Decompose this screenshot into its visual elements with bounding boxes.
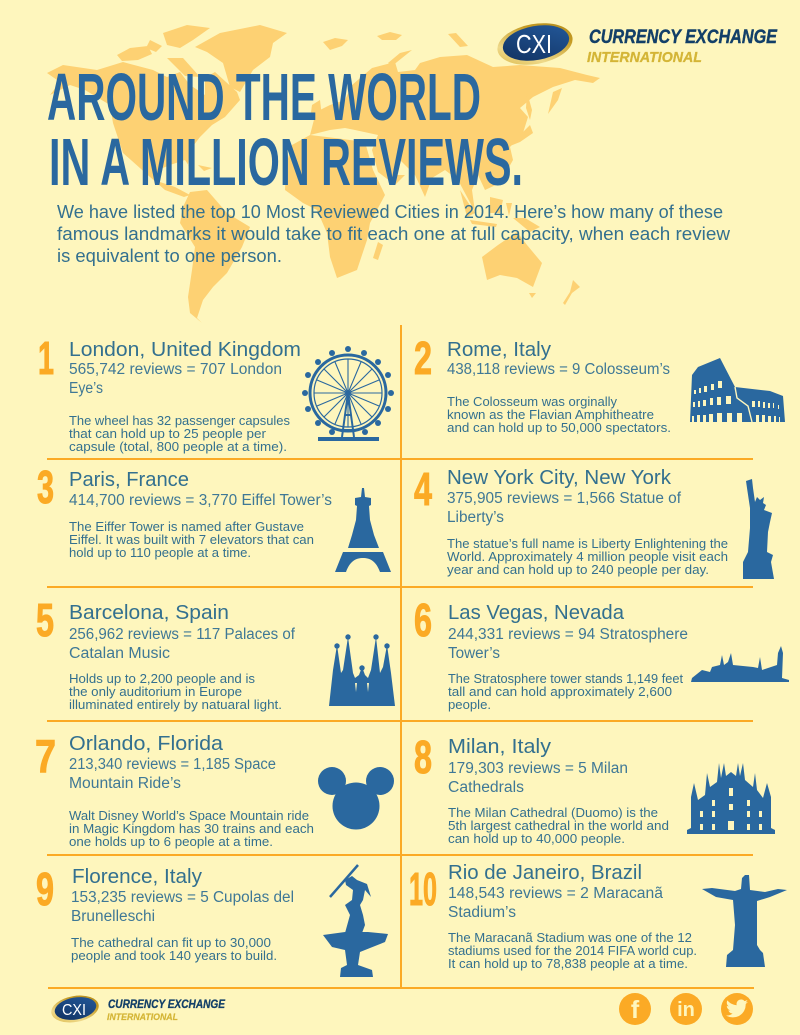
panel: Rome: and can hold up to 50,000 spectators. bbox=[447, 421, 671, 435]
panel: Rome: known as the Flavian Amphitheatre bbox=[447, 408, 654, 422]
panel: Milan: 5th largest cathedral in the world and bbox=[448, 819, 669, 833]
intro text: famous landmarks it would take to fit each one at full capacity, when each review bbox=[57, 224, 731, 244]
panel: London: Eye’s bbox=[69, 380, 103, 397]
panel: Orlando bbox=[35, 730, 394, 849]
panel: Florence: 153,235 reviews = 5 Cupolas del bbox=[71, 889, 294, 906]
icon: Sagrada Familia bbox=[329, 634, 395, 706]
panel: Rio de Janeiro: It can hold up to 78,838 people at a time. bbox=[448, 957, 688, 971]
social icons bbox=[619, 993, 753, 1025]
panel: Florence bbox=[36, 863, 388, 977]
panel: Milan: Cathedrals bbox=[448, 779, 524, 796]
panel: Las Vegas: Tower’s bbox=[448, 645, 500, 662]
icon: Eiffel Tower bbox=[335, 488, 391, 572]
icon: Christ the Redeemer bbox=[702, 875, 787, 967]
panel: New York: 375,905 reviews = 1,566 Statue of bbox=[447, 490, 682, 507]
panel: Milan: can hold up to 40,000 people. bbox=[448, 832, 625, 846]
panel: Rio de Janeiro: stadiums used for the 2014 FIFA world cup. bbox=[448, 944, 697, 958]
world map background bbox=[47, 25, 600, 323]
panel: Paris: 414,700 reviews = 3,770 Eiffel Tower’s bbox=[69, 492, 332, 509]
panel: Florence: Brunelleschi bbox=[71, 908, 155, 925]
icon: London Eye bbox=[302, 346, 394, 441]
panel: Las Vegas: Las Vegas, Nevada bbox=[448, 601, 625, 624]
panel: Milan: Milan, Italy bbox=[448, 735, 552, 758]
panel: New York: The statue’s full name is Liberty Enlightening the bbox=[447, 537, 728, 551]
panel: Florence: people and took 140 years to build. bbox=[71, 949, 277, 963]
icon: fountain statue bbox=[323, 865, 388, 977]
icon: Statue of Liberty bbox=[743, 479, 774, 579]
panel: Orlando: one holds up to 6 people at a time. bbox=[69, 835, 273, 849]
panel: London: that can hold up to 25 people per bbox=[69, 427, 266, 441]
panel: Las Vegas: tall and can hold approximately 2,600 bbox=[448, 685, 672, 699]
panel: Milan: 179,303 reviews = 5 Milan bbox=[448, 760, 628, 777]
panel: Paris: hold up to 110 people at a time. bbox=[69, 546, 251, 560]
icon: Mickey Mouse ears bbox=[318, 767, 394, 830]
panel: Milan bbox=[414, 731, 775, 846]
icon: Milan Cathedral bbox=[687, 763, 775, 834]
panel: Las Vegas: 244,331 reviews = 94 Stratosphere bbox=[448, 626, 688, 643]
panel: Barcelona: 256,962 reviews = 117 Palaces of bbox=[69, 626, 296, 643]
footer logo bbox=[49, 992, 226, 1026]
intro text: is equivalent to one person. bbox=[57, 246, 282, 266]
panel: Barcelona: the only auditorium in Europe bbox=[69, 685, 242, 699]
header logo: INTERNATIONAL bbox=[587, 49, 702, 66]
panel: London bbox=[38, 332, 394, 454]
title: AROUND THE WORLD bbox=[47, 60, 481, 135]
panel: Las Vegas bbox=[414, 594, 789, 712]
panel: Rio de Janeiro: 10 bbox=[409, 863, 437, 915]
panel: Orlando: Walt Disney World’s Space Mountain ride bbox=[69, 809, 309, 823]
panel: New York: year and can hold up to 240 people per day. bbox=[447, 563, 709, 577]
grid lines bbox=[47, 325, 754, 989]
panel: Orlando: in Magic Kingdom has 30 trains and each bbox=[69, 822, 314, 836]
panel: Barcelona: illuminated entirely by natuaral light. bbox=[69, 698, 282, 712]
panel: Barcelona: Barcelona, Spain bbox=[69, 601, 229, 624]
icon: Facebook: f bbox=[631, 996, 640, 1024]
panel: London: 1 bbox=[38, 332, 54, 384]
panel: London: London, United Kingdom bbox=[69, 338, 301, 361]
title bbox=[47, 60, 523, 200]
panel: Orlando: 7 bbox=[35, 730, 56, 782]
panel: Rio de Janeiro: Stadium’s bbox=[448, 904, 516, 921]
header logo: CXI bbox=[516, 29, 552, 59]
panel: Las Vegas: The Stratosphere tower stands 1,149 feet bbox=[448, 672, 684, 686]
panel: New York: 4 bbox=[414, 463, 432, 515]
panel: Rome: The Colosseum was orginally bbox=[447, 395, 618, 409]
panel: London: capsule (total, 800 people at a time). bbox=[69, 440, 287, 454]
title: IN A MILLION REVIEWS. bbox=[49, 125, 523, 200]
panel: Rome: 438,118 reviews = 9 Colosseum’s bbox=[447, 361, 670, 378]
panel: Paris: 3 bbox=[37, 461, 54, 513]
icon: Colosseum bbox=[690, 358, 785, 422]
panel: Orlando: Mountain Ride’s bbox=[69, 775, 181, 792]
panel: Rome bbox=[414, 332, 785, 435]
panel: Paris: Paris, France bbox=[69, 468, 189, 491]
panel: Orlando: Orlando, Florida bbox=[69, 732, 224, 755]
panel: Rio de Janeiro: 148,543 reviews = 2 Maracanã bbox=[448, 885, 663, 902]
panel: Rio de Janeiro: Rio de Janeiro, Brazil bbox=[448, 861, 642, 884]
panel: Florence: 9 bbox=[36, 863, 54, 915]
panel: Milan: 8 bbox=[414, 731, 432, 783]
intro text bbox=[57, 202, 731, 266]
panel: New York: World. Approximately 4 million people visit each bbox=[447, 550, 728, 564]
panel: Rio de Janeiro: The Maracanã Stadium was one of the 12 bbox=[448, 931, 692, 945]
panel: Las Vegas: 6 bbox=[414, 594, 432, 646]
panel: New York bbox=[414, 463, 774, 579]
panel: Milan: The Milan Cathedral (Duomo) is the bbox=[448, 806, 658, 820]
panel: Barcelona bbox=[36, 594, 395, 712]
panel: Paris: The Eiffer Tower is named after Gustave bbox=[69, 520, 304, 534]
icon: Twitter bbox=[721, 993, 753, 1025]
footer logo: CURRENCY EXCHANGE bbox=[108, 997, 226, 1011]
panel: Florence: The cathedral can fit up to 30,000 bbox=[71, 936, 271, 950]
header logo bbox=[494, 18, 778, 70]
panel: London: 565,742 reviews = 707 London bbox=[69, 361, 282, 378]
footer logo: CXI bbox=[62, 1002, 86, 1019]
panel: Barcelona: Catalan Music bbox=[69, 645, 170, 662]
panel: Paris bbox=[37, 461, 391, 572]
panel: Florence: Florence, Italy bbox=[72, 865, 203, 888]
panel: New York: New York City, New York bbox=[447, 466, 672, 489]
panel: Barcelona: 5 bbox=[36, 594, 54, 646]
panel: Paris: Eiffel. It was built with 7 elevators that can bbox=[69, 533, 314, 547]
intro text: We have listed the top 10 Most Reviewed Cities in 2014. Here’s how many of these bbox=[57, 202, 723, 222]
panel: Barcelona: Holds up to 2,200 people and is bbox=[69, 672, 255, 686]
panel: New York: Liberty’s bbox=[447, 509, 504, 526]
icon: LinkedIn: in bbox=[677, 999, 695, 1021]
panel: Orlando: 213,340 reviews = 1,185 Space bbox=[69, 756, 276, 773]
panel: London: The wheel has 32 passenger capsules bbox=[69, 414, 290, 428]
footer logo: INTERNATIONAL bbox=[107, 1012, 178, 1023]
panel: Las Vegas: people. bbox=[448, 698, 491, 712]
panel: Rome: Rome, Italy bbox=[447, 338, 552, 361]
panel: Rome: 2 bbox=[414, 332, 432, 384]
panel: Rio de Janeiro bbox=[409, 861, 787, 971]
icon: Las Vegas skyline bbox=[691, 646, 789, 682]
